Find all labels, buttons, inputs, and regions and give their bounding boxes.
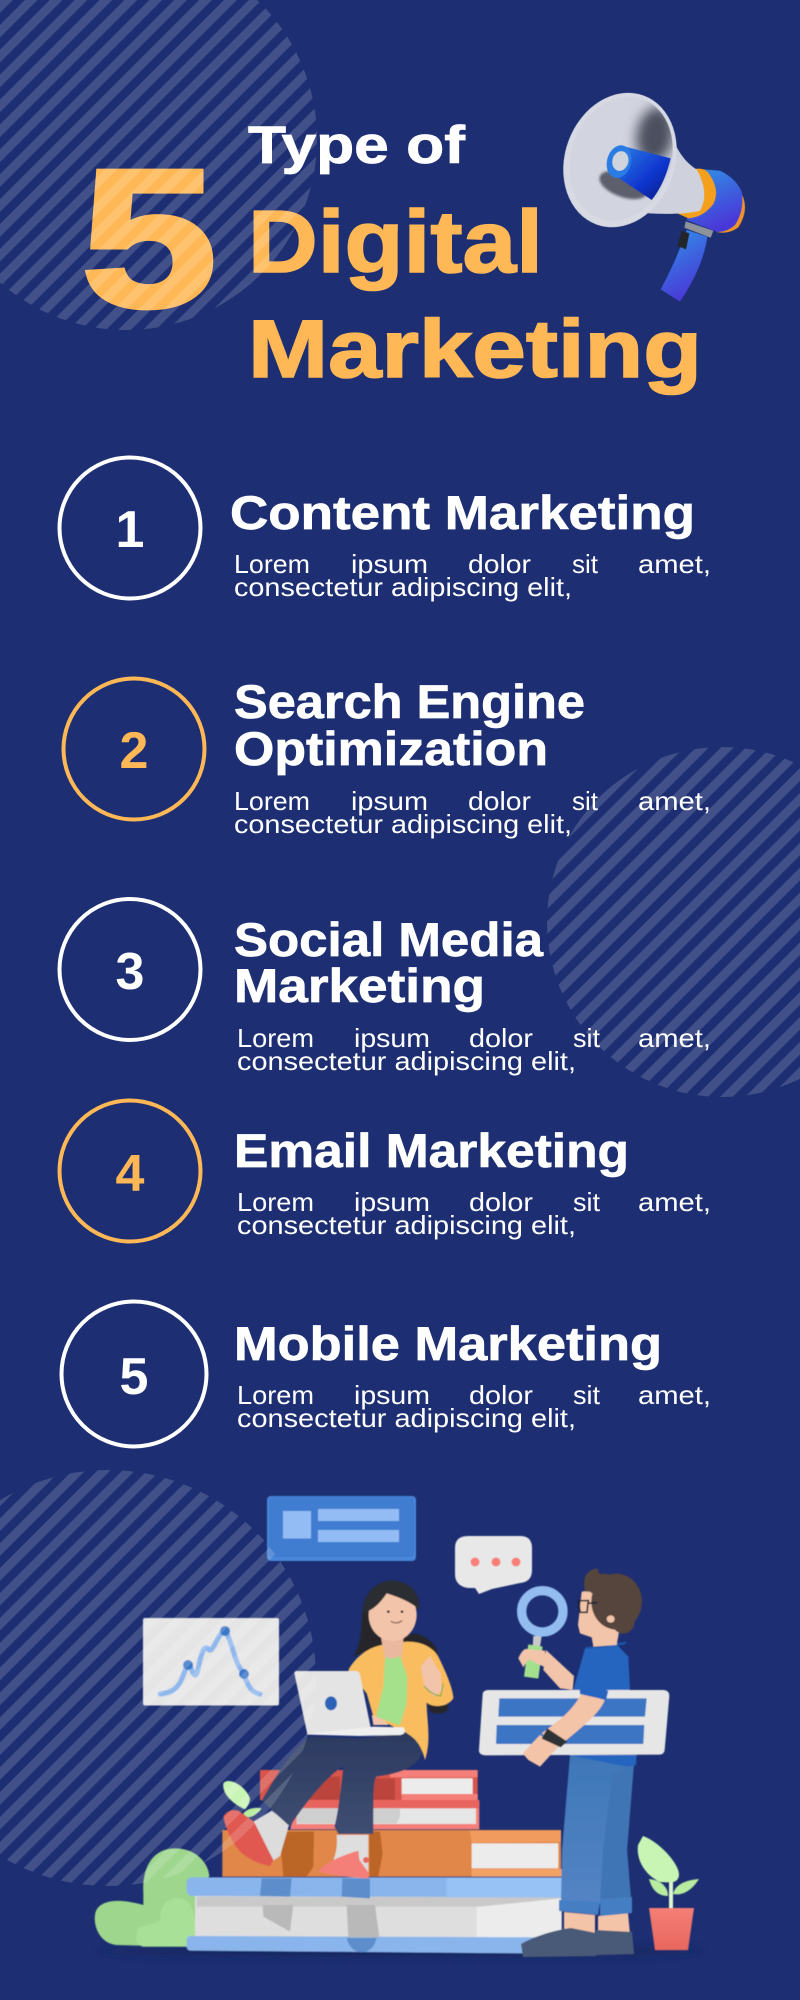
number badge 4: 4 xyxy=(116,1145,145,1203)
heading: Mobile Marketing: Mobile Marketing xyxy=(234,1317,662,1370)
illustration: team with books xyxy=(95,1496,700,1957)
laptop xyxy=(294,1671,405,1736)
number badge 4 xyxy=(60,1100,200,1242)
woman: trousers xyxy=(262,1733,422,1834)
woman xyxy=(223,1581,453,1878)
description: ipsum xyxy=(354,1023,430,1053)
description xyxy=(234,549,711,602)
potted plant xyxy=(638,1836,699,1950)
number badge 2 xyxy=(64,678,204,820)
list item 1 xyxy=(60,458,711,602)
bush xyxy=(95,1781,262,1947)
woman: shirt xyxy=(376,1656,407,1726)
speech bubble xyxy=(455,1536,532,1594)
book: upper red xyxy=(260,1770,478,1800)
man: shoes xyxy=(521,1928,634,1957)
description: consectetur adipiscing elit, xyxy=(237,1046,576,1076)
heading: Search Engine Optimization: Search Engine xyxy=(234,675,585,728)
description: sit xyxy=(572,549,599,579)
number badge 2: 2 xyxy=(120,722,148,780)
card: blue layout xyxy=(267,1496,416,1561)
man: jeans xyxy=(561,1755,634,1904)
number badge 5: 5 xyxy=(120,1348,148,1406)
description: dolor xyxy=(468,549,531,579)
description: amet, xyxy=(638,1380,711,1410)
description xyxy=(237,1187,711,1240)
woman: raised hand xyxy=(421,1656,442,1696)
man: ear xyxy=(607,1615,615,1623)
card: line chart xyxy=(143,1618,279,1706)
woman: face xyxy=(387,1610,403,1623)
book: orange xyxy=(222,1830,562,1877)
description: amet, xyxy=(638,549,711,579)
man: jeans inner leg xyxy=(600,1764,634,1901)
stack of books xyxy=(187,1770,562,1953)
woman: hair back xyxy=(353,1603,448,1714)
hatched circle: right xyxy=(547,747,800,1097)
description: sit xyxy=(572,786,599,816)
description: ipsum xyxy=(351,786,428,816)
list item 3 xyxy=(60,899,711,1076)
number badge 5 xyxy=(62,1302,206,1446)
icon: megaphone xyxy=(563,92,746,302)
man: shirt xyxy=(568,1644,637,1767)
description: consectetur adipiscing elit, xyxy=(237,1403,576,1433)
woman: fringe xyxy=(363,1581,419,1613)
title line: Marketing: Marketing xyxy=(248,304,702,395)
man: left arm xyxy=(543,1650,574,1690)
description: dolor xyxy=(468,786,531,816)
heading: Social Media Marketing: Marketing xyxy=(234,959,485,1012)
title line: Type of: Type of xyxy=(248,116,465,175)
man: head xyxy=(578,1588,620,1647)
number badge 1 xyxy=(60,458,200,598)
description: amet, xyxy=(638,786,711,816)
woman: jacket xyxy=(348,1642,453,1760)
man: glasses xyxy=(579,1601,597,1612)
description: Lorem xyxy=(234,549,310,579)
description: sit xyxy=(573,1023,601,1053)
description: dolor xyxy=(469,1023,533,1053)
description xyxy=(234,786,711,839)
description: amet, xyxy=(638,1187,711,1217)
list item 5 xyxy=(62,1302,711,1446)
title block xyxy=(81,116,702,395)
man: ankles xyxy=(564,1912,630,1934)
big number 5: 5 xyxy=(81,129,217,348)
description: Lorem xyxy=(234,786,310,816)
book: blue xyxy=(187,1877,562,1953)
description xyxy=(237,1380,711,1433)
list item 2 xyxy=(64,675,711,839)
description: Lorem xyxy=(237,1023,314,1053)
woman: neck xyxy=(380,1632,404,1660)
description: sit xyxy=(573,1380,601,1410)
info board xyxy=(479,1690,669,1755)
description: Lorem xyxy=(237,1380,314,1410)
number badge 1: 1 xyxy=(116,501,144,559)
magnifier xyxy=(518,1591,563,1679)
description: ipsum xyxy=(351,549,428,579)
number badge 3 xyxy=(60,899,200,1040)
woman: shoes xyxy=(223,1810,369,1878)
man: cuffs xyxy=(559,1897,632,1916)
description: ipsum xyxy=(354,1187,430,1217)
title line: Digital: Digital xyxy=(248,192,543,291)
woman: head xyxy=(369,1589,417,1641)
heading: Email Marketing: Email Marketing xyxy=(234,1124,629,1177)
description xyxy=(237,1023,711,1076)
description: consectetur adipiscing elit, xyxy=(234,572,572,602)
description: consectetur adipiscing elit, xyxy=(237,1210,576,1240)
book: lower red xyxy=(290,1800,479,1829)
description: dolor xyxy=(469,1380,533,1410)
description: sit xyxy=(573,1187,601,1217)
ground shadow xyxy=(100,1946,700,1956)
hatched circle: top left xyxy=(0,0,317,330)
number badge 3: 3 xyxy=(116,943,144,1001)
heading: Content Marketing: Content Marketing xyxy=(230,486,695,539)
heading: Search Engine Optimization: Optimization xyxy=(234,722,548,775)
man xyxy=(479,1568,669,1957)
man: hair xyxy=(584,1568,642,1634)
description: amet, xyxy=(638,1023,711,1053)
hatched circle: bottom left xyxy=(0,1470,316,1886)
list item 4 xyxy=(60,1100,711,1242)
description: consectetur adipiscing elit, xyxy=(234,809,572,839)
heading: Search Engine Optimization xyxy=(234,675,585,775)
heading: Social Media Marketing xyxy=(234,913,544,1012)
description: ipsum xyxy=(354,1380,430,1410)
heading: Social Media Marketing: Social Media xyxy=(234,913,544,966)
man: right arm xyxy=(542,1693,605,1747)
description: Lorem xyxy=(237,1187,314,1217)
description: dolor xyxy=(469,1187,533,1217)
